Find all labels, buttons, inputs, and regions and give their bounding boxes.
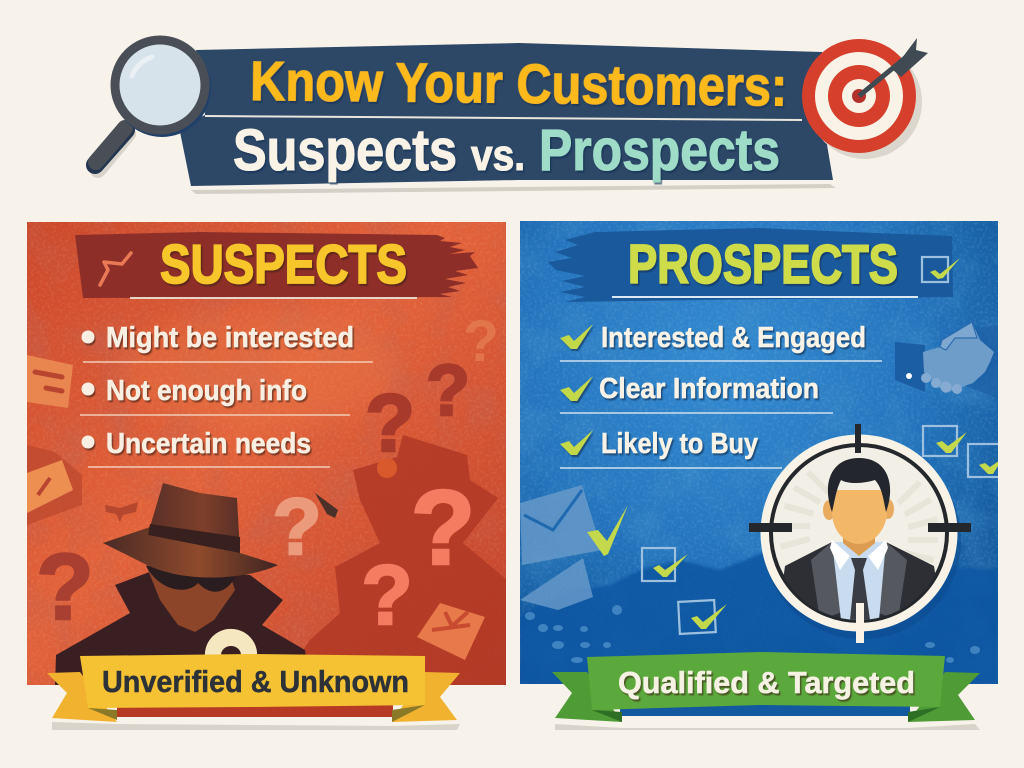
suspects header brush	[75, 232, 478, 298]
person neck	[843, 538, 875, 556]
person suit	[784, 542, 935, 618]
dark lower wash	[520, 550, 998, 684]
shadow figure	[304, 435, 506, 685]
icon: targeted customer in crosshair	[749, 424, 971, 643]
icon: target with arrow	[802, 38, 928, 159]
ribbon: unverified and unknown: Unverified & Unknown	[102, 664, 409, 699]
list item: uncertain needs: Uncertain needs	[106, 428, 311, 460]
question marks: ?	[426, 351, 470, 431]
title line two: Prospects	[539, 118, 780, 183]
banner shadow	[191, 184, 836, 194]
crosshair background rays	[780, 470, 938, 563]
list item: interested and engaged: Interested & Engaged	[601, 322, 866, 354]
banner shape	[179, 43, 833, 186]
prospects list	[560, 322, 882, 468]
icon: envelopes	[520, 485, 602, 610]
title line two: Suspects	[233, 118, 457, 183]
panel: prospects	[520, 221, 1003, 730]
paper scrap: tile	[417, 603, 485, 660]
paint splashes	[525, 605, 980, 663]
title line one: Know Your Customers:	[250, 49, 788, 118]
question marks: ?	[365, 378, 415, 469]
icon: magnifying glass	[95, 39, 211, 170]
question marks: ?	[411, 469, 475, 587]
question marks: ?	[36, 534, 94, 639]
icon: header checkbox	[922, 257, 960, 282]
small plane and cursor shapes	[105, 493, 338, 522]
paper scrap: lower left	[27, 445, 82, 525]
person ears	[823, 500, 832, 520]
person hair	[828, 458, 890, 512]
list item: not enough info: Not enough info	[106, 375, 307, 407]
ribbon: qualified and targeted: Qualified & Targeted	[618, 665, 915, 700]
crosshair marks	[855, 424, 861, 453]
list item: might be interested: Might be interested	[106, 322, 354, 354]
title line two: vs.	[471, 131, 525, 180]
question marks	[36, 309, 499, 642]
person tie	[850, 558, 870, 620]
icon: handshake	[895, 322, 998, 400]
suspects list	[80, 322, 373, 467]
prospects header brush	[548, 228, 960, 302]
panel ribbon backing	[117, 684, 393, 717]
person face	[832, 490, 887, 544]
icon: big check	[587, 505, 628, 556]
ribbon: unverified and unknown	[47, 654, 460, 730]
ribbon: qualified and targeted	[552, 652, 980, 730]
question marks: ?	[273, 482, 321, 571]
question marks: ?	[463, 309, 499, 374]
list item: clear information: Clear Information	[599, 373, 819, 405]
squiggle mark	[100, 253, 131, 285]
paper scrap: top left	[27, 355, 73, 408]
question marks: ?	[361, 548, 413, 642]
title banner	[179, 43, 836, 194]
panel: suspects	[27, 222, 507, 730]
suspects heading: SUSPECTS	[160, 233, 407, 295]
figure: suspect in hat and coat	[55, 483, 310, 685]
prospects heading: PROSPECTS	[628, 233, 898, 295]
icon: checkbox group	[642, 426, 1003, 634]
list item: likely to buy: Likely to Buy	[601, 428, 758, 460]
panel ribbon backing	[620, 684, 910, 716]
